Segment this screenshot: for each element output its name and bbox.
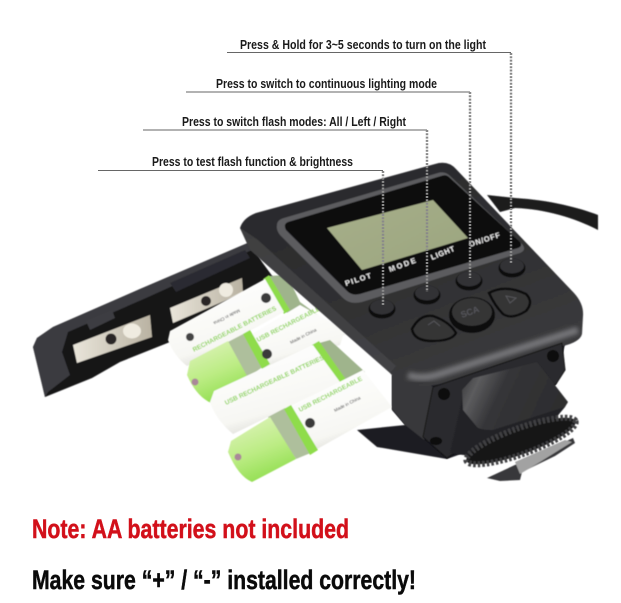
illustration: battery door xyxy=(33,242,273,397)
button labels: ON/OFF xyxy=(468,230,501,249)
note: batteries not included: Note: AA batteries not included xyxy=(32,514,349,544)
note: install correctly: Make sure “+” / “-” installed correctly! xyxy=(32,565,416,595)
screw holes xyxy=(547,350,559,362)
shoe foot xyxy=(487,438,575,481)
buttons: SCA xyxy=(459,304,481,320)
battery: front: USB RECHARGEABLE xyxy=(298,375,364,414)
gear ring xyxy=(462,409,580,473)
label: on/off: Press & Hold for 3~5 seconds to turn on the light xyxy=(240,38,487,52)
button labels: MODE xyxy=(388,256,417,274)
battery: second with green cap xyxy=(187,305,345,403)
cable xyxy=(487,195,598,230)
leader: mode xyxy=(143,130,427,292)
contact plate: left xyxy=(73,315,152,363)
battery: front: Made in China xyxy=(333,395,362,413)
buttons xyxy=(368,258,530,341)
battery: back top: Made in China xyxy=(212,308,241,326)
battery: second with green cap: Made in China xyxy=(289,327,318,345)
label: pilot: Press to test flash function & brightness xyxy=(152,155,353,169)
battery: back top: RECHARGEABLE BATTERIES xyxy=(192,305,278,354)
batteries xyxy=(168,275,392,482)
flash body xyxy=(240,163,583,458)
contact plate: right xyxy=(170,278,243,323)
mounting plate xyxy=(423,343,565,458)
leader: on/off xyxy=(227,52,511,264)
foot metal xyxy=(515,440,572,474)
battery: front xyxy=(228,370,392,482)
leader: pilot xyxy=(98,170,383,306)
battery: back top xyxy=(168,275,345,366)
battery: second with green cap: USB RECHARGEABLE xyxy=(256,305,322,344)
button labels: LIGHT xyxy=(429,244,456,262)
flash lower housing xyxy=(357,340,566,459)
screen bezel xyxy=(277,172,524,303)
battery: third white: USB RECHARGEABLE BATTERIES xyxy=(224,354,326,407)
leader: light xyxy=(186,92,470,278)
label: light: Press to switch to continuous lighting mode xyxy=(216,77,437,91)
top face xyxy=(240,163,583,386)
rim highlight xyxy=(408,330,578,377)
label: mode: Press to switch flash modes: All / Left / Right xyxy=(182,115,407,129)
button labels: PILOT xyxy=(344,271,373,288)
battery: third white xyxy=(210,340,365,434)
LCD display xyxy=(327,200,468,270)
hot shoe xyxy=(450,362,580,481)
button labels xyxy=(344,230,501,288)
side face xyxy=(392,372,433,440)
